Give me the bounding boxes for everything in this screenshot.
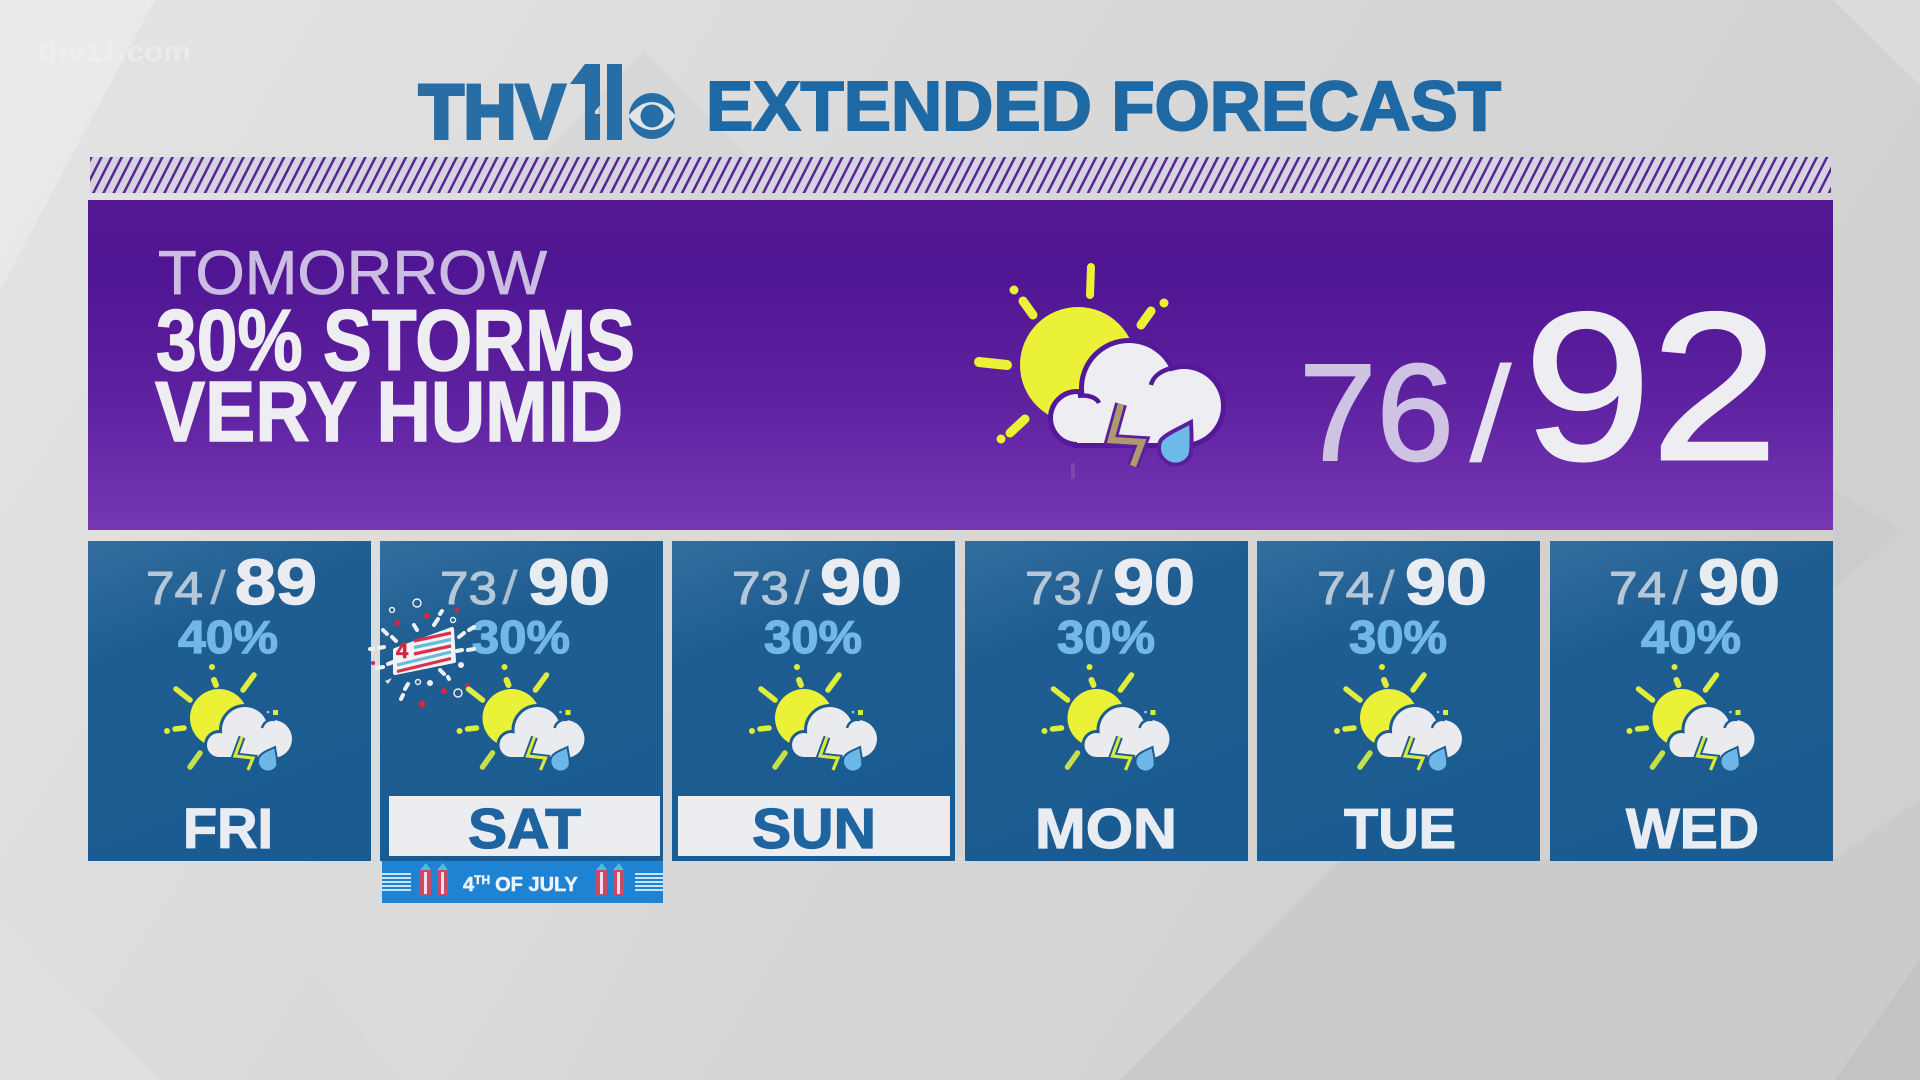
card: saturday [380, 541, 663, 861]
card: monday: / [1087, 561, 1104, 614]
card: tuesday [1257, 541, 1540, 861]
banner text: 4 [463, 874, 474, 896]
icon: partly sunny storm [749, 664, 877, 772]
card: sunday [672, 541, 955, 861]
icon: july 4th flag with fireworks [370, 599, 474, 708]
day label: WED [1626, 797, 1759, 861]
card: monday: 30% [1057, 611, 1155, 663]
logo: THV11 CBS: THV [419, 70, 565, 155]
day label box [389, 796, 660, 856]
card: monday: 73 [1025, 562, 1082, 614]
icon: july 4th flag with fireworks: 4 [396, 638, 409, 663]
hatched divider strip [90, 157, 1831, 193]
watermark: thv11.com: thv11.com [38, 36, 191, 67]
card: sunday: / [794, 561, 811, 614]
card: saturday: / [502, 561, 519, 614]
banner text: OF JULY [495, 874, 578, 896]
card: wednesday: 74 [1609, 562, 1666, 614]
logo: THV11 CBS: 11 [566, 42, 626, 163]
banner: 4th of july [382, 861, 663, 903]
card: saturday: 73 [440, 562, 497, 614]
rockets right [596, 863, 624, 895]
slash: / [1469, 338, 1512, 490]
card: friday: 74 [146, 562, 203, 614]
card: sunday: 73 [732, 562, 789, 614]
card: wednesday [1550, 541, 1833, 861]
card: monday: 90 [1113, 546, 1195, 618]
day label: MON [1035, 797, 1177, 861]
text: storms chance: 30% STORMS [156, 293, 635, 389]
card: tuesday: / [1379, 561, 1396, 614]
day label: FRI [183, 797, 273, 861]
icon: partly sunny storm [1626, 664, 1754, 772]
card: tuesday: 30% [1349, 611, 1447, 663]
icon: partly sunny storm [164, 664, 292, 772]
icon: partly sunny storm [1334, 664, 1462, 772]
panel: tomorrow [88, 200, 1833, 530]
title: EXTENDED FORECAST [706, 67, 1501, 145]
day label box [678, 796, 950, 856]
icon: partly sunny storm [456, 664, 584, 772]
low temperature 76: 76 [1299, 336, 1454, 490]
card: friday: 40% [178, 611, 278, 663]
card: sunday: 90 [820, 546, 902, 618]
icon: partly sunny storm [1042, 664, 1170, 772]
heading: tomorrow: TOMORROW [158, 239, 547, 308]
card: friday [88, 541, 371, 861]
text: humidity: VERY HUMID [155, 365, 623, 460]
card: saturday: 30% [472, 611, 570, 663]
card: wednesday: 40% [1641, 611, 1741, 663]
card: monday [965, 541, 1248, 861]
banner text: TH [474, 873, 490, 887]
day label: SUN [752, 797, 876, 861]
card: saturday: 90 [528, 546, 610, 618]
card: sunday: 30% [764, 611, 862, 663]
day label: TUE [1344, 797, 1456, 861]
card: wednesday: / [1672, 561, 1689, 614]
rockets left [420, 863, 448, 895]
card: friday: / [210, 561, 227, 614]
card: wednesday: 90 [1698, 546, 1780, 618]
card: friday: 89 [235, 546, 317, 618]
logo: THV11 CBS [418, 64, 676, 140]
high temperature 92: 92 [1524, 269, 1778, 504]
icon: sun and storm cloud [979, 267, 1221, 479]
card: tuesday: 90 [1405, 546, 1487, 618]
card: tuesday: 74 [1317, 562, 1374, 614]
day label: SAT [468, 797, 581, 861]
